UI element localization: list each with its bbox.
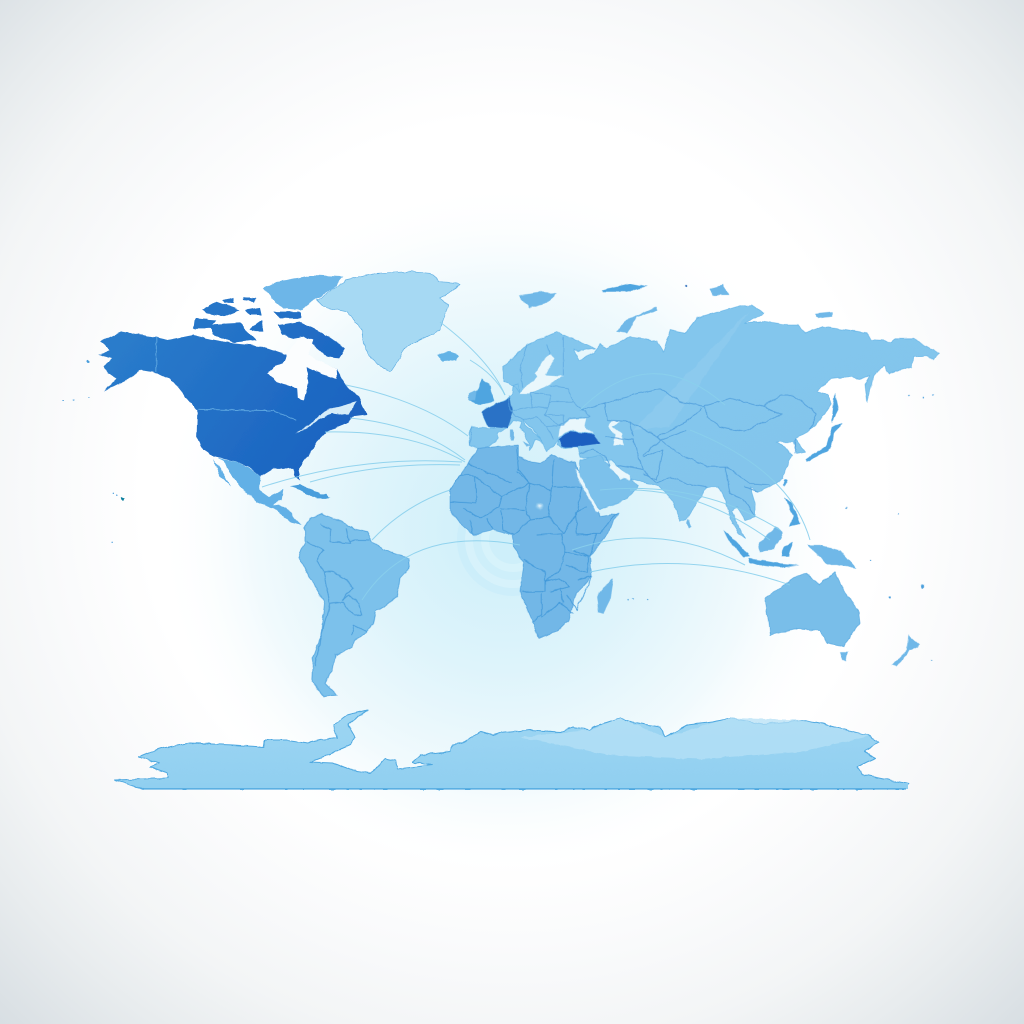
Ocean island dots (627, 285, 934, 661)
Turkey (558, 432, 601, 447)
Greenland (317, 272, 460, 372)
Cuba and Caribbean (290, 485, 330, 498)
Mexico and Central America (218, 458, 302, 525)
Ellesmere Island (263, 275, 343, 310)
Red Sea (574, 469, 599, 512)
Africa borders (450, 447, 617, 622)
Iceland (437, 352, 460, 362)
Antarctica straight base (143, 783, 908, 790)
Baja California (213, 458, 231, 486)
connection arcs (262, 322, 810, 600)
US Canada border (156, 337, 297, 421)
Arabia (578, 455, 638, 510)
United States and Canada (98, 297, 367, 480)
France (482, 397, 513, 428)
Eurasia (468, 305, 940, 538)
South America borders (307, 523, 370, 667)
land masses (63, 272, 940, 789)
pulse rings (457, 484, 569, 596)
Aleutian dots (63, 360, 118, 544)
Europe borders (470, 337, 590, 445)
Eurasia Africa Oceania (450, 283, 940, 667)
background glow (155, 180, 855, 880)
Eurasia borders (580, 388, 817, 517)
Persian Gulf (610, 463, 630, 481)
Hudson Bay (268, 337, 337, 400)
Hawaii (121, 497, 125, 501)
Baltic Sea (520, 355, 563, 394)
Asia highlight band (633, 310, 750, 430)
Africa (450, 445, 618, 638)
Australia (765, 572, 860, 647)
Islands (468, 283, 920, 667)
Caspian Sea (608, 420, 623, 445)
Central light spot (535, 502, 544, 510)
South America (298, 514, 409, 697)
Black Sea (558, 418, 593, 437)
Antarctica highlight (520, 718, 870, 759)
Saint Lawrence (295, 402, 357, 433)
Antarctica (115, 710, 909, 789)
Greenland and North America (63, 272, 460, 544)
